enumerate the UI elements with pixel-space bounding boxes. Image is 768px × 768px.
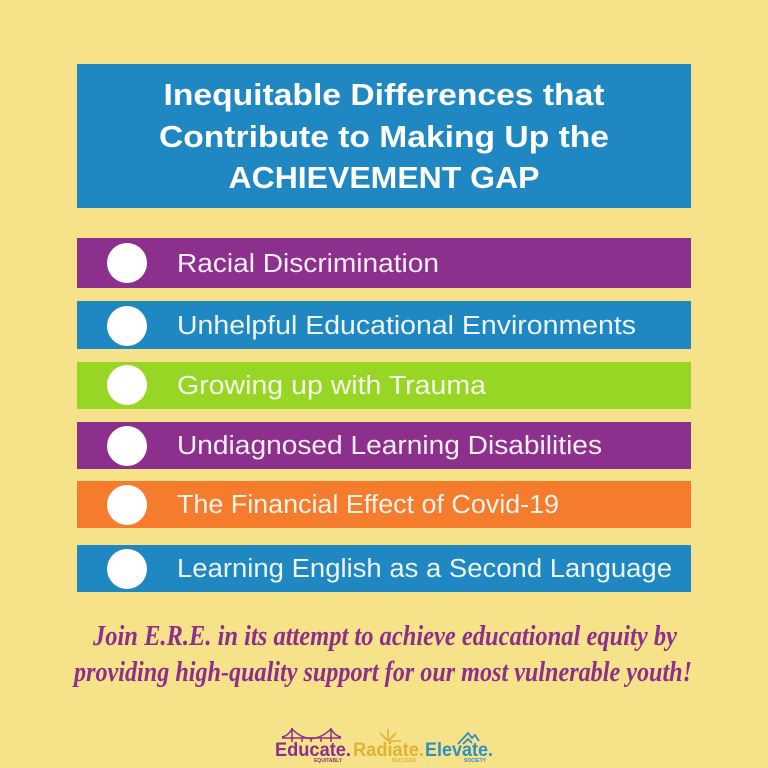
- logo: educate radiate elevate: SUCCESS: [392, 758, 417, 764]
- icon: bridge: [282, 728, 341, 742]
- row: undiagnosed learning disabilities: [77, 422, 691, 469]
- row: financial effect of covid-19: The Financial Effect of Covid-19: [177, 491, 559, 519]
- row: growing up with trauma: [77, 362, 691, 409]
- row: financial effect of covid-19: [77, 481, 691, 528]
- row: racial discrimination: Racial Discrimination: [177, 250, 439, 278]
- row: racial discrimination: [77, 238, 691, 288]
- logo: educate radiate elevate: Radiate.: [353, 740, 424, 761]
- icon: sun: [380, 729, 401, 741]
- logo: educate radiate elevate: SOCIETY: [464, 758, 487, 764]
- row: english as a second language: [77, 545, 691, 592]
- title panel: Contribute to Making Up the: [159, 119, 609, 154]
- row: unhelpful educational environments: Unhelpful Educational Environments: [177, 312, 636, 340]
- title panel: Inequitable Differences that: [164, 77, 604, 112]
- title panel: ACHIEVEMENT GAP: [228, 160, 540, 195]
- logo: educate radiate elevate: [275, 728, 493, 764]
- icon: mountains: [458, 733, 479, 744]
- row: unhelpful educational environments: [77, 301, 691, 349]
- row: growing up with trauma: Growing up with Trauma: [177, 372, 487, 400]
- logo wordmarks: Educate.: [275, 740, 351, 761]
- logo: educate radiate elevate: Elevate.: [425, 740, 493, 761]
- title panel: [77, 64, 691, 208]
- row: undiagnosed learning disabilities: Undiagnosed Learning Disabilities: [177, 432, 602, 460]
- call to action text: Join E.R.E. in its attempt to achieve educational equity by: [92, 621, 677, 652]
- row: english as a second language: Learning English as a Second Language: [177, 555, 672, 583]
- call to action text: [72, 621, 692, 688]
- logo: educate radiate elevate: EQUITABLY: [314, 758, 343, 764]
